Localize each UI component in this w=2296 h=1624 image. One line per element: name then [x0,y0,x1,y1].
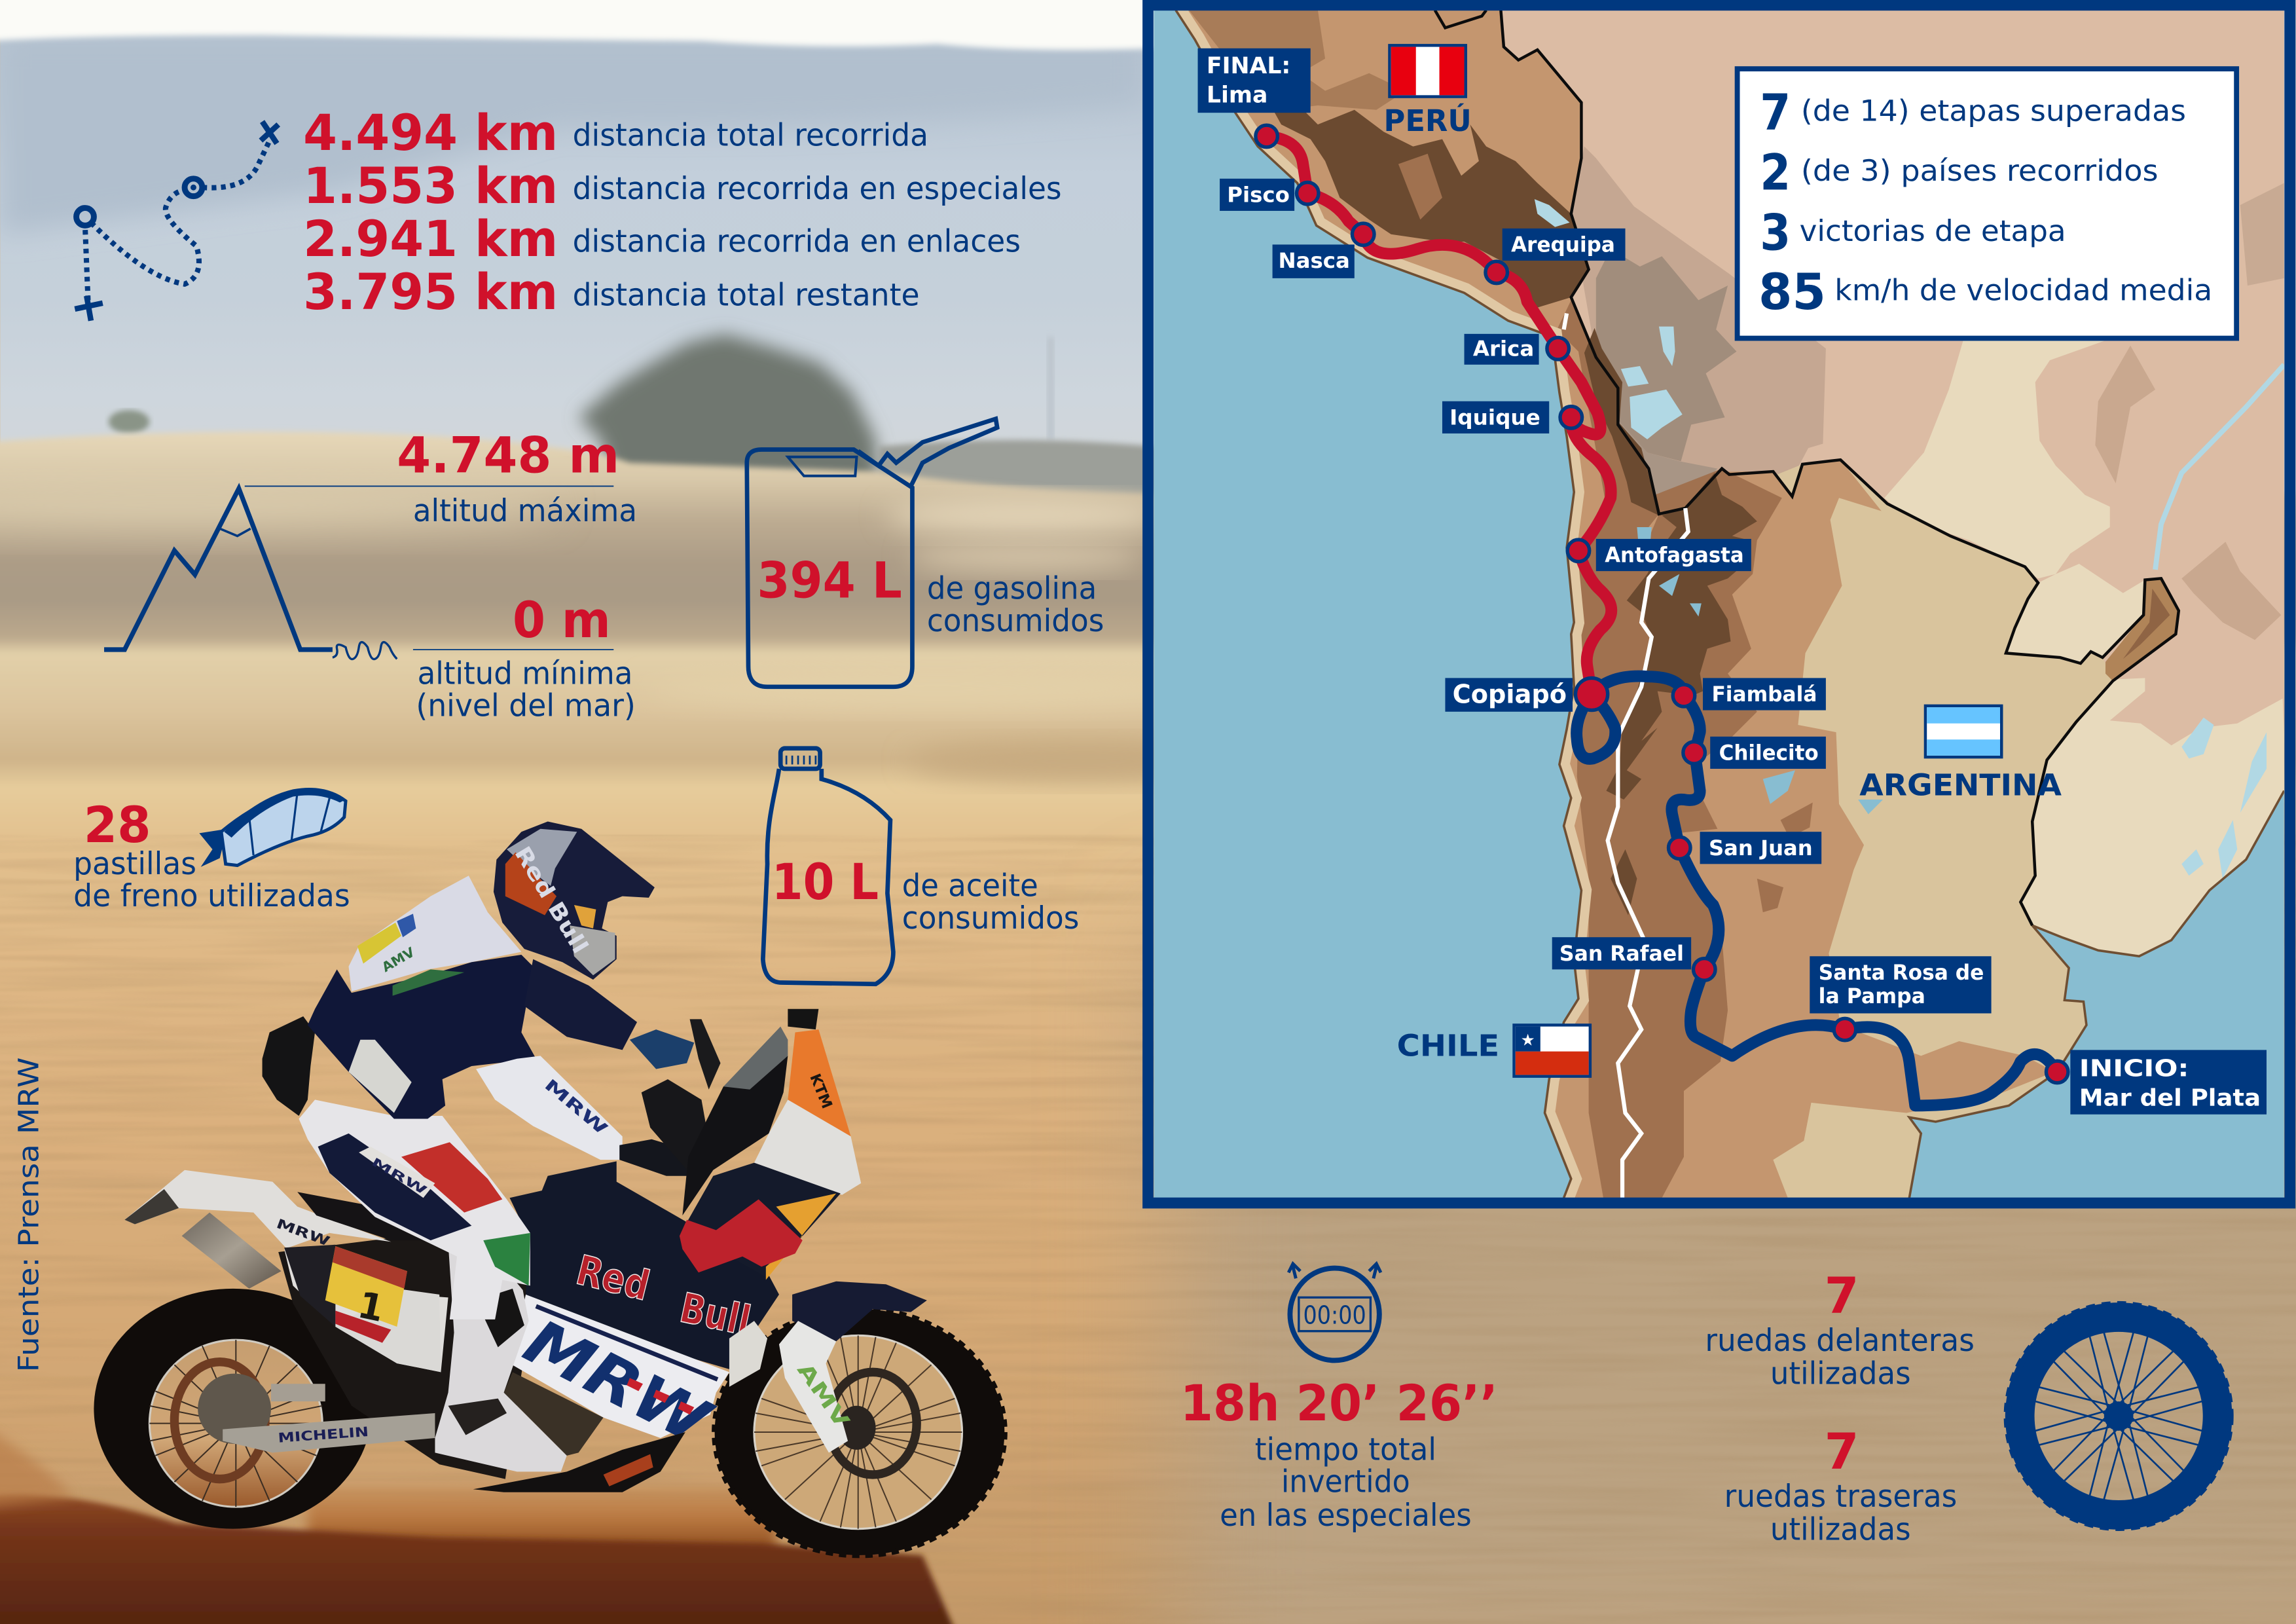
navigation tower: KTM [806,1071,835,1111]
label: Nasca: Nasca [1279,248,1350,273]
handlebar and instruments [642,1079,712,1172]
label: Antofagasta: Antofagasta [1605,543,1744,568]
brake pads stat [73,796,350,914]
altitude stats: altitud mínima [418,655,632,692]
stat: average speed: 85 [1758,263,1826,321]
front wheels stat: 7 [1825,1266,1859,1325]
country label: Peru: PERÚ [1384,103,1472,138]
stat: link distance: 2.941 km [303,210,558,268]
map frame [1148,5,2290,1203]
stat: link distance: distancia recorrida en enlaces [573,224,1021,260]
icon: stopwatch [1288,1264,1381,1360]
map: Uruguay brown strip [2105,578,2179,681]
brake pads stat: pastillas [73,846,196,882]
front wheels stat: ruedas delanteras [1705,1323,1975,1359]
label: FINAL Lima [1198,48,1311,113]
front wheels stat [1705,1266,1975,1392]
tail and side panel [124,1170,448,1372]
icon: jerry can [747,419,997,687]
map: national borders [1435,10,2179,925]
number plate [325,1246,407,1343]
label: Pisco: Pisco [1227,183,1290,208]
distance stats [303,103,1062,321]
map: Argentina lowlands [1552,460,2113,1198]
altitude stats: (nivel del mar) [416,688,636,724]
label: INICIO Mar del Plata: INICIO: [2079,1056,2189,1082]
label: San Rafael: San Rafael [1559,941,1684,966]
rider arms: MRW [541,1075,611,1139]
rear wheels stat [1724,1422,1957,1547]
tank sponsor text: Bull [676,1283,755,1345]
label: FINAL Lima: Lima [1207,83,1267,109]
photo: motorcycle and rider [94,822,1004,1555]
map: pale eastern lowlands [1884,341,2110,579]
rider arms [476,959,721,1176]
label: INICIO Mar del Plata [2070,1050,2267,1115]
fork [779,1321,854,1452]
stat: average speed [1758,263,2212,321]
label: San Juan [1700,832,1821,864]
rear wheel [94,1289,372,1529]
fork: AMV [792,1359,854,1433]
altitude stats: 4.748 m [397,426,619,484]
fuel tank [509,1161,779,1369]
front wheels stat: utilizadas [1770,1356,1911,1392]
exhaust [182,1213,282,1289]
swingarm [223,1413,435,1452]
label: Iquique: Iquique [1449,405,1540,430]
map: Bolivian highlands [1573,147,1826,474]
number plate: 1 [354,1284,388,1331]
stat: special stages distance [303,157,1062,215]
label: Arica [1465,334,1539,365]
map: coastal strip [1176,10,1581,1198]
icon: oil bottle [763,748,893,984]
brake pads stat: 28 [84,796,151,854]
stat: stages [1760,83,2186,141]
icon: stopwatch: 00:00 [1303,1301,1366,1330]
time stat: tiempo total [1255,1432,1436,1468]
panel: stage summary [1738,69,2236,339]
photo: sand crest and dust [0,1428,959,1624]
boot [435,1240,567,1471]
icon: wheel [2007,1304,2230,1527]
map: Peru high relief [1274,103,1589,308]
stat: average speed: km/h de velocidad media [1834,272,2212,307]
map: Andes mid relief [1577,469,1782,1198]
engine [504,1372,604,1456]
label: Fiambalá [1703,678,1826,710]
tank sponsor text [572,1246,755,1345]
label: Chilecito [1710,737,1826,769]
flag: Peru [1389,45,1466,97]
label: Santa Rosa de la Pampa: la Pampa [1819,984,1925,1008]
fuel stat: de gasolina [927,571,1097,607]
stat: stages: (de 14) etapas superadas [1801,94,2186,128]
map: Andes high relief [1606,473,1757,800]
stat: countries [1760,143,2159,202]
helmet [494,822,655,980]
rider legs: MRW [369,1155,429,1198]
stat: stages: 7 [1760,83,1791,141]
altitude stats: altitud máxima [413,493,637,529]
radiator shroud [729,1321,767,1387]
icon: dotted route [75,122,278,321]
oil stat [772,853,1079,936]
map: northern Chile relief [1552,300,1659,564]
photo: motorcycle and rider: MRW [274,1215,332,1249]
engine and frame underlay [278,1230,535,1479]
front wheel [715,1309,1004,1555]
photo: motorcycle and rider: MICHELIN [278,1424,369,1446]
stat: countries: (de 3) países recorridos [1801,153,2159,188]
tank sponsor text: Red [572,1246,654,1310]
brake pads stat: de freno utilizadas [73,878,350,914]
map: Peru upper relief [1189,10,1406,110]
label: Chilecito: Chilecito [1719,741,1819,766]
stat: total distance [303,103,928,162]
flag: Chile [1514,1025,1590,1077]
fairing with logo: MRW [513,1306,723,1460]
altitude stats: 0 m [513,591,611,649]
map: darker pink relief [2095,346,2155,483]
stat: countries: 2 [1760,143,1791,202]
flag: Argentina [1925,706,2001,757]
stat: victories [1760,204,2066,262]
label: Iquique [1442,401,1549,434]
label: Arequipa: Arequipa [1511,232,1615,257]
label: Pisco [1220,179,1294,211]
label: Fiambalá: Fiambalá [1711,682,1817,707]
map: Andes foothills [1552,460,2054,1198]
rear wheels stat: 7 [1825,1422,1859,1481]
panel: route map [1148,5,2290,1203]
stat: remaining distance [303,263,920,321]
time stat: en las especiales [1220,1498,1472,1534]
stat: total distance: 4.494 km [303,103,558,162]
stat: link distance [303,210,1021,268]
stat: special stages distance: 1.553 km [303,157,558,215]
map: land base [1502,10,2284,1197]
stat: victories: 3 [1760,204,1791,262]
red bull logo [680,1199,803,1272]
label: Santa Rosa de la Pampa: Santa Rosa de [1819,960,1984,985]
map: Chile-Argentina white border [1564,314,1688,1198]
map: route stops [1256,125,2068,1083]
time stat [1180,1374,1498,1534]
label: Arequipa [1503,229,1626,261]
country label: Argentina: ARGENTINA [1859,767,2062,802]
map: oceans [1154,10,2284,1198]
icon: mountain altitude [104,486,613,659]
rider jacket [308,876,536,1118]
source credit: Fuente: Prensa MRW [13,1058,45,1372]
map: lakes and rivers [1535,199,2267,879]
helmet: Red Bull [509,842,593,958]
seat [297,1192,473,1240]
stat: remaining distance: 3.795 km [303,263,558,321]
stat: total distance: distancia total recorrida [573,118,928,154]
stat: remaining distance: distancia total restante [573,277,920,313]
oil stat: 10 L [772,853,879,911]
altitude stats [397,426,637,724]
oil stat: consumidos [902,900,1079,936]
map: Peru mid relief [1176,10,1659,557]
time stat: invertido [1281,1464,1410,1500]
stat: victories: victorias de etapa [1800,213,2066,248]
label: Nasca [1273,244,1355,278]
navigation tower [682,1009,861,1280]
flag: Chile: ★ [1521,1031,1535,1050]
rear wheels stat: utilizadas [1770,1511,1911,1547]
oil stat: de aceite [902,868,1038,904]
label: FINAL Lima: FINAL: [1207,53,1290,79]
rider bag [263,1016,315,1116]
map: coast outlines [1176,10,2284,1198]
map: blue route [1576,676,2057,1105]
front fender [792,1282,927,1341]
label: INICIO Mar del Plata: Mar del Plata [2079,1084,2261,1111]
fuel stat [757,551,1104,639]
rider legs [299,1099,530,1320]
stat: special stages distance: distancia recorrida en especiales [573,171,1062,207]
fuel stat: consumidos [927,603,1104,639]
rider jacket: AMV [379,944,418,975]
time stat: 18h 20’ 26’’ [1180,1374,1498,1432]
skid plate [473,1432,685,1492]
icon: brake pad [199,788,346,867]
country label: Chile: CHILE [1397,1027,1499,1063]
rear wheels stat: ruedas traseras [1724,1479,1957,1515]
label: San Juan: San Juan [1709,836,1813,860]
label: Arica: Arica [1473,336,1534,361]
fuel stat: 394 L [757,551,902,609]
map: completed red route [1267,136,1611,694]
label: Copiapó: Copiapó [1453,680,1567,709]
label: Santa Rosa de la Pampa [1810,956,1992,1013]
